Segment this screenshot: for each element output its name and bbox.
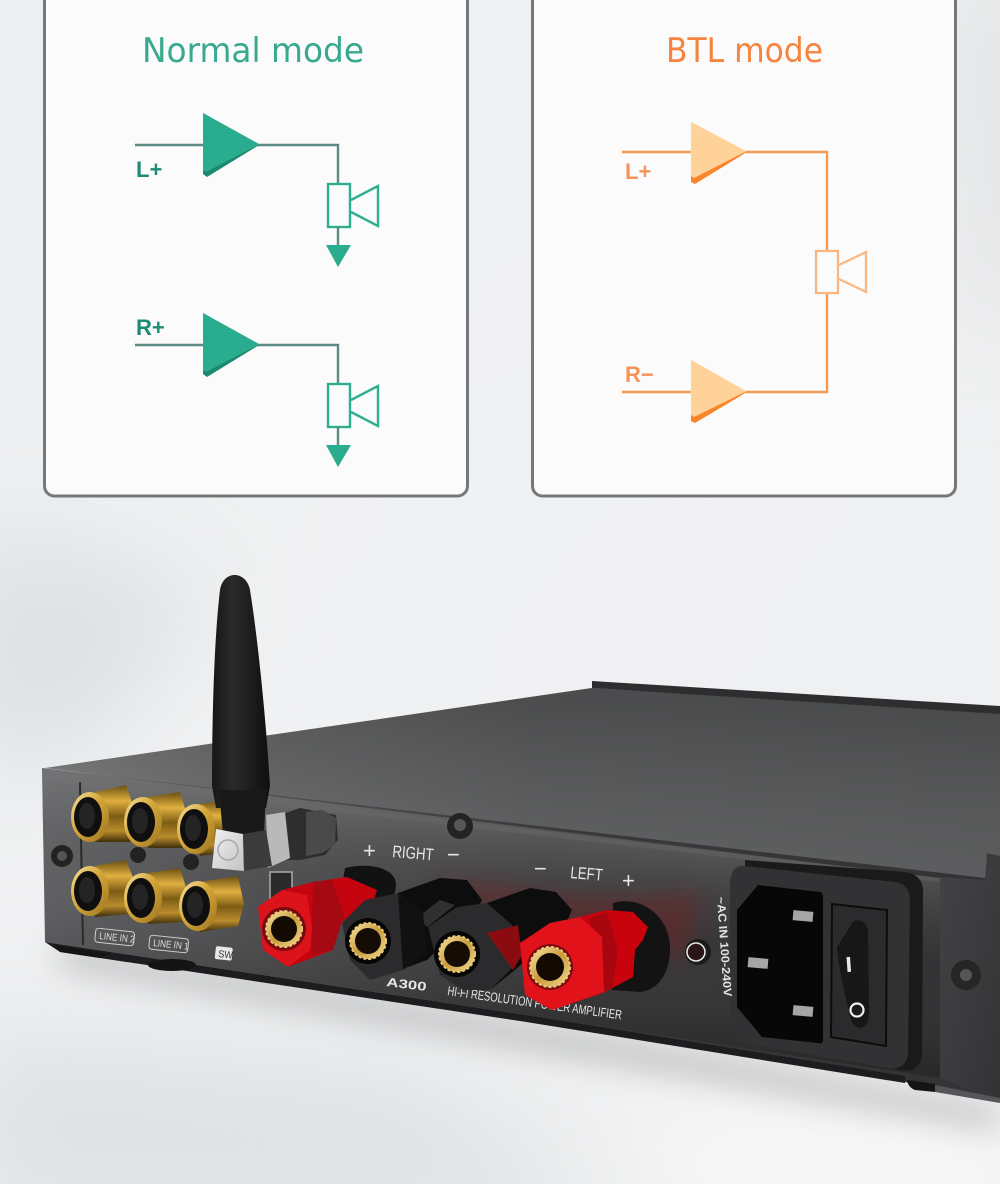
- input labels: LINE IN 2: [99, 930, 135, 945]
- panel labels: RIGHT: [392, 843, 434, 865]
- heading: Normal mode: Normal mode: [142, 31, 364, 71]
- power rating label: ~AC IN 100-240V: [714, 896, 733, 997]
- panel labels: −: [534, 856, 547, 881]
- binding post: black left minus: [428, 888, 572, 990]
- circuit: bridged output: L+: [625, 159, 651, 184]
- binding post: black right minus: [342, 878, 482, 980]
- panel: BTL mode: [532, 0, 956, 496]
- input labels: SW: [218, 949, 233, 962]
- circuit: bridged output: R−: [625, 362, 654, 387]
- panel labels: LEFT: [570, 864, 604, 885]
- panel labels: +: [363, 838, 376, 863]
- input labels: LINE IN 1: [153, 937, 189, 952]
- feet: [55, 945, 1000, 1103]
- RCA jacks: [71, 785, 244, 932]
- panel labels: A300: [386, 976, 427, 994]
- antenna: [212, 575, 338, 871]
- panel labels: +: [622, 868, 635, 893]
- heading: BTL mode: BTL mode: [666, 31, 823, 71]
- panel labels: HI-FI RESOLUTION POWER AMPLIFIER: [447, 985, 623, 1023]
- circuit: right channel: [135, 313, 378, 467]
- panel: Normal mode: [44, 0, 468, 496]
- power inlet and switch: [730, 860, 923, 1070]
- floor shadow: [60, 945, 1000, 1128]
- small jack: [685, 939, 711, 965]
- circuit: right channel: R+: [136, 315, 165, 340]
- binding post: red right plus: [258, 866, 396, 967]
- amplifier front panel: [42, 768, 1000, 1102]
- USB port: [270, 872, 292, 900]
- amplifier top panel: [45, 681, 1000, 882]
- amplifier: [42, 575, 1000, 1103]
- circuit: left channel: [135, 113, 378, 267]
- panel labels: [363, 838, 635, 1023]
- binding post: red left plus: [520, 901, 670, 1010]
- circuit: left channel: L+: [136, 157, 162, 182]
- input labels: [95, 928, 233, 962]
- circuit: bridged output: [622, 122, 866, 423]
- screws: [51, 813, 981, 990]
- panel labels: −: [447, 842, 460, 867]
